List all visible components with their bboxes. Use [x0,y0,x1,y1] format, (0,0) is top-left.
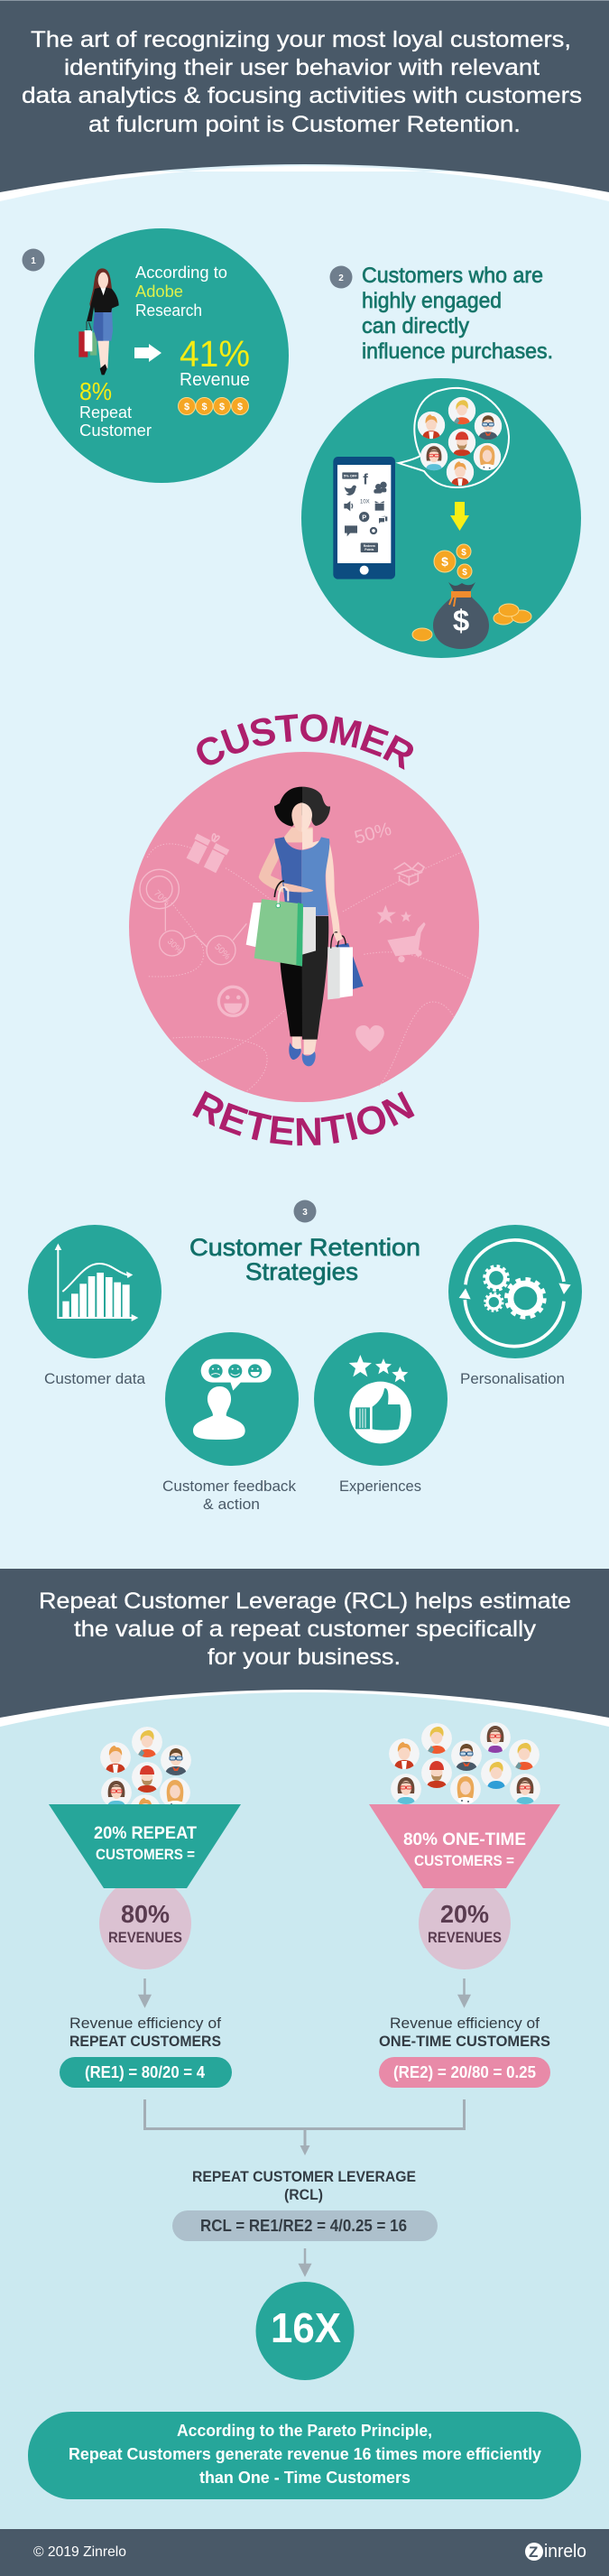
revenue circle: REVENUES [108,1929,182,1946]
pill: RE1 [60,2057,232,2088]
funnel label [94,1824,197,1863]
revenue circle [419,1877,511,1969]
badge 1 [22,249,45,271]
heading: strategies: Strategies [245,1258,358,1285]
decorative shopping icons: 50% [352,819,393,848]
header text: The art of recognizing your most loyal customers, [31,27,571,52]
icon: smartphone with social icons: P [362,513,366,521]
text: revenue efficiency repeat: REPEAT CUSTOMERS [69,2033,221,2050]
pill: RE2 [379,2057,550,2088]
icon: bar chart [55,1244,138,1321]
copyright: © 2019 Zinrelo [33,2544,126,2560]
panel: pink circle [129,752,479,1102]
revenue circle: 20% [440,1900,489,1928]
strategy: experiences: Experiences [339,1478,421,1495]
heading: customers highly engaged: can directly [362,314,469,338]
icon: smartphone with social icons: f [363,471,368,488]
funnel shape [49,1804,241,1888]
text: revenue efficiency repeat [69,2015,221,2050]
arrow: yellow down [450,502,469,531]
revenue circle [99,1877,191,1969]
header text: data analytics & focusing activities with customers [22,83,582,108]
header banner [0,0,609,201]
stat: 41% revenue: Revenue [180,370,250,390]
stat: 8% repeat customer: 8% [79,377,112,405]
strategy: personalisation [448,1225,582,1387]
avatars [100,1727,191,1825]
icon: falling coins: $ [441,554,448,569]
text: revenue efficiency one-time: ONE-TIME CUSTOMERS [379,2033,550,2050]
funnel label [403,1830,526,1869]
pill: RE1: (RE1) = 80/20 = 4 [85,2063,205,2081]
speech bubble with avatars [399,388,509,487]
icon: coins [179,397,249,415]
banner text [39,1589,571,1670]
funnel label: CUSTOMERS = [414,1852,514,1869]
badge 3: 3 [302,1208,308,1218]
revenue circle: 80% [121,1900,170,1928]
arrow: to result [300,2248,310,2275]
text: according to adobe research: Adobe [135,283,183,301]
result: 16X [256,2282,354,2380]
strategy: customer feedback [162,1332,299,1513]
icon: smartphone with social icons: Points [364,548,374,551]
strategy: experiences [314,1332,448,1495]
arrow: left down [140,1978,150,2006]
result: 16X: 16X [271,2304,341,2351]
pill: RE2: (RE2) = 20/80 = 0.25 [393,2063,536,2081]
icon: falling coins [434,544,472,579]
heading: strategies [189,1234,420,1285]
pill: RCL formula: RCL = RE1/RE2 = 4/0.25 = 16 [200,2217,407,2235]
strategy: personalisation: Personalisation [460,1370,565,1387]
heading: repeat customer leverage: (RCL) [284,2186,323,2203]
icon: falling coins: $ [462,568,467,578]
callout: pareto principle [28,2412,581,2499]
panel: engaged customers illustration [301,378,581,658]
logo: zinrelo: Z [529,2544,538,2561]
icon: smartphone with social icons: Redeem [364,544,375,548]
RCL banner [0,1569,609,1727]
strategy: customer feedback: Customer feedback [162,1478,297,1495]
icon: coins: $ [201,402,208,412]
heading: repeat customer leverage [192,2168,416,2203]
icon: businesswoman with bags [78,268,119,375]
heading arc: customer: CUSTOMER [197,714,413,770]
decorative shopping icons [140,819,471,1092]
funnel shape [369,1804,560,1888]
hero: customer retention [129,714,479,1146]
badge 2: 2 [338,273,344,283]
header text: identifying their user behavior with relevant [64,55,540,80]
funnel: one-time customers [369,1722,560,1969]
icon: coin stacks [412,604,531,641]
logo: zinrelo: inrelo [544,2542,586,2562]
icon: thumbs up with stars [349,1355,411,1443]
icon: coins: $ [237,402,243,412]
banner text: for your business. [208,1645,401,1670]
funnel: repeat customers [49,1727,241,1969]
header text [22,27,582,137]
decorative shopping icons: 70% [152,888,171,908]
heading: strategies: Customer Retention [189,1234,420,1261]
text: revenue efficiency repeat: Revenue efficiency of [69,2015,221,2032]
heading: customers highly engaged: Customers who are [362,264,543,288]
text: according to adobe research: Research [135,301,202,320]
stat: 8% repeat customer [79,377,152,440]
arrow: right down [459,1978,469,2006]
strategy: customer feedback: & action [203,1496,260,1513]
text: revenue efficiency one-time: Revenue efficiency of [390,2015,540,2032]
header text: at fulcrum point is Customer Retention. [88,112,521,137]
funnel label: CUSTOMERS = [96,1846,195,1863]
icon: smartphone with social icons [333,457,395,579]
panel: adobe research stat [22,228,289,483]
stat: 8% repeat customer: Repeat [79,403,132,422]
heading: customers highly engaged: influence purchases. [362,339,553,364]
connector to RCL [144,2099,464,2155]
funnel label: 80% ONE-TIME [403,1830,526,1849]
heading: customers highly engaged: highly engaged [362,289,502,313]
badge 1: 1 [31,256,36,266]
lower section background [0,1569,609,2576]
funnel label: 20% REPEAT [94,1824,197,1843]
stat: 8% repeat customer: Customer [79,422,152,440]
heading: customers highly engaged [362,264,553,364]
avatars [389,1722,540,1804]
illustration: woman with shopping bags [246,787,364,1066]
callout: pareto principle: According to the Pareto Principle, [177,2422,432,2440]
badge 2 [330,265,352,289]
icon: coins: $ [219,402,225,412]
banner text: the value of a repeat customer specifically [74,1617,537,1642]
icon: smartphone with social icons: 10X [360,499,370,505]
icon: money bag: $ [453,604,469,637]
callout: pareto principle: Repeat Customers generate revenue 16 times more efficiently [69,2445,541,2463]
footer [0,2529,609,2576]
pill: RCL formula [172,2210,438,2241]
strategy: customer data [28,1225,161,1387]
text: according to adobe research [135,264,227,320]
heading: repeat customer leverage: REPEAT CUSTOMER LEVERAGE [192,2168,416,2185]
callout: pareto principle: than One - Time Customers [199,2469,411,2487]
arrow [134,344,161,362]
section: customer retention strategies [28,1200,582,1513]
heading arc: retention: RETENTION [192,1090,415,1146]
icon: gears in cycle [459,1240,571,1347]
strategy: customer data: Customer data [44,1370,146,1387]
stat: 41% revenue: 41% [180,333,250,375]
icon: falling coins: $ [461,548,466,558]
text: according to adobe research: According to [135,264,227,282]
banner text: Repeat Customer Leverage (RCL) helps estimate [39,1589,571,1614]
decorative shopping icons: 50% [212,942,232,962]
icon: person with feedback bubble [193,1359,272,1440]
revenue circle: REVENUES [428,1929,502,1946]
icon: coins: $ [184,402,189,412]
decorative shopping icons: 30% [166,937,184,955]
badge 3 [294,1200,316,1222]
icon: money bag [433,582,489,649]
logo: zinrelo [525,2542,586,2562]
text: revenue efficiency one-time [379,2015,550,2050]
icon: smartphone with social icons: 5% OFF [344,473,357,477]
